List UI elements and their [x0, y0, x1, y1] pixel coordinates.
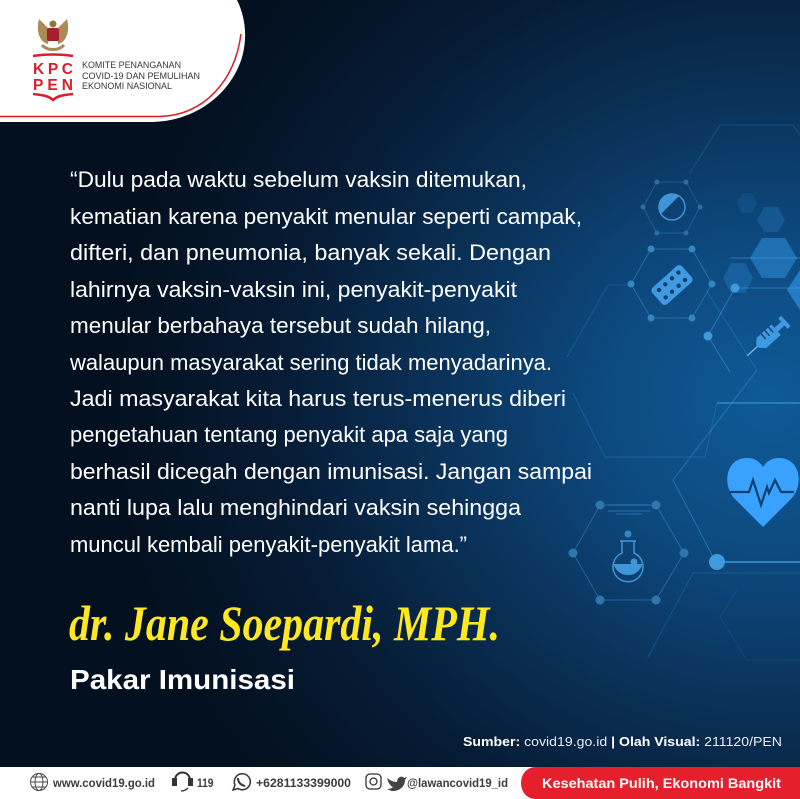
speaker title: Pakar Imunisasi: [70, 664, 295, 695]
source credit: Sumber: covid19.go.id | Olah Visual: 211120/PEN: [463, 734, 782, 749]
tagline pill: [521, 767, 800, 799]
icon: heart with pulse: [727, 458, 799, 527]
icon: twitter: [387, 777, 407, 791]
quote text: walaupun masyarakat sering tidak menyadarinya.: [69, 350, 552, 375]
quote text: berhasil dicegah dengan imunisasi. Jangan sampai: [70, 459, 592, 484]
tagline pill: Kesehatan Pulih, Ekonomi Bangkit: [542, 775, 781, 791]
hotline: 119: [197, 778, 214, 790]
KPC PEN wordmark: KPC: [33, 61, 73, 78]
speaker name: dr. Jane Soepardi, MPH.: [69, 595, 500, 651]
social handle: @lawancovid19_id: [407, 778, 508, 790]
icon: whatsapp: [233, 774, 250, 790]
quote text: difteri, dan pneumonia, banyak sekali. Dengan: [70, 240, 551, 265]
quote text: lahirnya vaksin-vaksin ini, penyakit-penyakit: [70, 277, 517, 302]
icon: flask in hexagon: [568, 500, 688, 604]
quote text: kematian karena penyakit menular seperti campak,: [70, 204, 582, 229]
logo panel: [0, 0, 245, 122]
committee name: EKONOMI NASIONAL: [82, 81, 172, 91]
quote text: pengetahuan tentang penyakit apa saja yang: [70, 422, 508, 447]
icon: headset: [173, 773, 192, 791]
quote text: “Dulu pada waktu sebelum vaksin ditemukan,: [70, 167, 527, 192]
KPC PEN wordmark: PEN: [33, 77, 73, 94]
committee name: KOMITE PENANGANAN: [82, 60, 181, 70]
icon: globe: [30, 774, 48, 790]
quote text: nanti lupa lalu menghindari vaksin sehingga: [70, 495, 522, 520]
icon: syringe: [743, 316, 791, 361]
footer bar: [0, 767, 800, 799]
quote text: Jadi masyarakat kita harus terus-menerus diberi: [70, 386, 566, 411]
emblem: garuda: [38, 19, 68, 50]
logo red curve: [0, 34, 241, 116]
icon: pill in hexagon: [640, 180, 702, 236]
icon: blister pack in hexagon: [628, 246, 716, 322]
pale hexagon cluster: [723, 193, 800, 310]
phone number: +6281133399000: [256, 778, 351, 790]
website: www.covid19.go.id: [52, 778, 155, 790]
hexagon network decoration: [567, 125, 800, 660]
committee name: [82, 60, 200, 91]
hexagon connector nodes: [704, 258, 800, 570]
committee name: COVID-19 DAN PEMULIHAN: [82, 71, 200, 81]
quote text: muncul kembali penyakit-penyakit lama.”: [70, 532, 467, 557]
icon: instagram: [366, 774, 381, 789]
KPC PEN wordmark: [33, 54, 73, 100]
quote text: menular berbahaya tersebut sudah hilang,: [70, 313, 491, 338]
quote text: [69, 167, 592, 557]
